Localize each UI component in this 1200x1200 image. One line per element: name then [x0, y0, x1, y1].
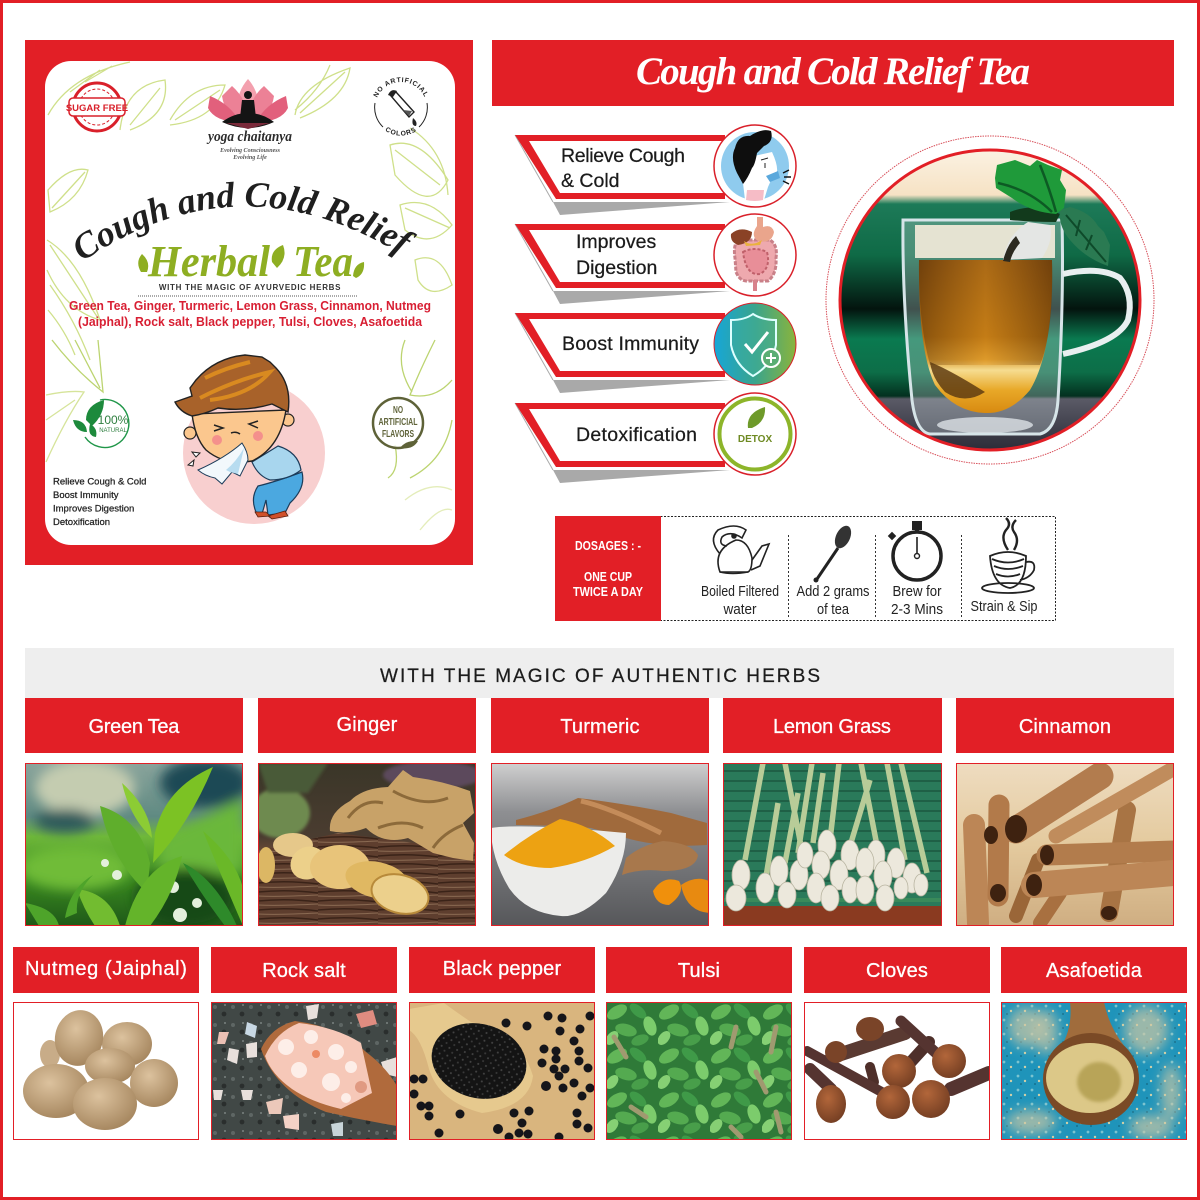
- icon: kettle: [713, 526, 769, 574]
- icon: shield with check: [714, 303, 796, 385]
- herb name: [25, 698, 243, 753]
- step: boiled filtered water: Boiled Filtered: [701, 583, 779, 600]
- benefit text: [576, 231, 657, 279]
- benefit: boost immunity: [515, 303, 796, 393]
- header banner: cough and cold relief tea: [492, 40, 1174, 106]
- ribbon: [515, 313, 730, 393]
- mint leaves: [995, 160, 1110, 266]
- step: add 2 grams of tea: Add 2 grams: [796, 583, 870, 600]
- step: strain and sip: [970, 518, 1038, 615]
- illustration: sneezing boy: [175, 355, 325, 524]
- label white card: [45, 61, 455, 545]
- herb card: green tea: [20, 698, 250, 928]
- herb card: cloves: [804, 947, 990, 1140]
- hair: [175, 355, 289, 416]
- ribbon: [515, 135, 730, 215]
- step: boiled filtered water: water: [723, 601, 756, 618]
- photo: cloves: [805, 1016, 989, 1123]
- benefit: relieve cough and cold: [515, 125, 796, 215]
- badge: no artificial flavors: NO: [393, 405, 403, 416]
- herb card: asafoetida: [1001, 947, 1187, 1140]
- logo: yoga chaitanya lotus: Evolving Consciousness: [219, 148, 281, 154]
- herb name: [1001, 947, 1187, 993]
- step: add 2 grams of tea: [796, 523, 870, 618]
- photo: tea leaves: [26, 764, 242, 925]
- herb card: rock salt: [211, 947, 397, 1140]
- badge: no artificial colors: COLORS: [386, 127, 416, 136]
- decorative leaf outlines: [46, 62, 452, 530]
- benefit text: & Cold: [561, 170, 620, 192]
- photo: nutmegs: [23, 1010, 178, 1130]
- icon: spoon: [814, 523, 854, 582]
- panel: product label: [25, 40, 473, 565]
- step: strain and sip: Strain & Sip: [970, 598, 1038, 615]
- herb name: [258, 698, 476, 753]
- benefit text: Detoxification: [576, 424, 697, 446]
- herb name: [211, 947, 397, 993]
- label benefits list: Boost Immunity: [53, 490, 119, 501]
- step: brew for 2-3 mins: Brew for: [892, 583, 942, 600]
- herb name: [804, 947, 990, 993]
- herb card: black pepper: [409, 947, 595, 1142]
- icon: digestive system: [714, 214, 796, 296]
- panel: dosage instructions: [555, 516, 1056, 621]
- herb name: [13, 947, 199, 993]
- label red frame: [25, 40, 473, 565]
- herb name: [491, 698, 709, 753]
- photo: asafoetida spoon: [1002, 1003, 1186, 1139]
- herb name: [606, 947, 792, 993]
- badge: no artificial colors: [373, 77, 428, 136]
- jeans: [253, 472, 303, 515]
- herb name: Tulsi: [678, 960, 720, 982]
- benefit text: Improves: [576, 231, 656, 253]
- photo: ginger root: [259, 764, 475, 925]
- benefit text: Digestion: [576, 257, 657, 279]
- product subtitle: herbal tea: Herbal: [147, 237, 271, 286]
- head: [184, 427, 196, 439]
- herb name: Lemon Grass: [773, 716, 891, 738]
- icon: detox leaf: [714, 393, 796, 475]
- badge: 100% natural: 100%: [98, 413, 129, 427]
- section heading: with the magic of authentic herbs: [25, 648, 1174, 698]
- photo: peppercorns: [410, 1003, 594, 1139]
- herb name: [956, 698, 1174, 753]
- badge: no artificial flavors: ARTIFICIAL: [378, 417, 418, 428]
- herb card: turmeric: [491, 698, 709, 926]
- badge: 100% natural: [73, 400, 129, 448]
- badge: no artificial flavors: [373, 398, 423, 448]
- photo: lemongrass stalks: [724, 764, 941, 925]
- herb name: Cinnamon: [1019, 716, 1111, 738]
- herb name: Nutmeg (Jaiphal): [25, 958, 187, 980]
- step: boiled filtered water: [701, 526, 779, 618]
- tea mug photo: [826, 136, 1154, 464]
- label benefits list: Improves Digestion: [53, 504, 134, 514]
- photo: turmeric bowl: [492, 764, 708, 925]
- label benefits list: Detoxification: [53, 517, 110, 528]
- herb name: Cloves: [866, 960, 928, 982]
- ribbon: [515, 224, 730, 304]
- herb name: Asafoetida: [1046, 960, 1143, 982]
- label benefits list: [53, 476, 146, 528]
- step: add 2 grams of tea: of tea: [817, 601, 850, 618]
- photo: cinnamon sticks: [957, 764, 1173, 925]
- photo: pink rock salt: [212, 1003, 396, 1139]
- tissue: [198, 443, 248, 484]
- label benefits list: Relieve Cough & Cold: [53, 476, 146, 488]
- product title: cough and cold relief: Cough and Cold Relief: [75, 182, 418, 258]
- herb card: ginger: [250, 698, 483, 926]
- logo: yoga chaitanya lotus: yoga chaitanya: [206, 129, 292, 145]
- dosage red box: ONE CUP: [584, 569, 632, 584]
- dosage red box: DOSAGES : -: [575, 538, 641, 553]
- badge: no artificial colors: NO ARTIFICIAL: [373, 77, 428, 98]
- badge: no artificial flavors: FLAVORS: [382, 429, 414, 440]
- benefit text: [561, 145, 685, 192]
- herb name: Rock salt: [262, 960, 346, 982]
- herb card: nutmeg: [13, 947, 199, 1140]
- icon: stopwatch: [888, 521, 941, 580]
- sneeze droplets: [188, 452, 200, 466]
- badge: sugar free: [66, 83, 128, 131]
- herb name: Turmeric: [560, 716, 640, 738]
- icon: coughing man: [714, 125, 796, 207]
- benefit text: Boost Immunity: [562, 333, 699, 355]
- photo: tulsi plants: [607, 1003, 791, 1139]
- logo: yoga chaitanya lotus: [206, 79, 292, 161]
- step: brew for 2-3 mins: 2-3 Mins: [891, 601, 943, 618]
- benefit: improves digestion: [515, 214, 796, 304]
- herb name: [723, 698, 942, 753]
- header banner: cough and cold relief tea: Cough and Cold Relief Tea: [636, 50, 1030, 93]
- herb card: cinnamon: [956, 698, 1174, 926]
- icon: detox leaf: DETOX: [738, 434, 772, 445]
- herb name: Ginger: [337, 714, 398, 736]
- badge: 100% natural: NATURAL: [99, 428, 127, 434]
- herb card: lemon grass: [723, 698, 942, 926]
- section heading: with the magic of authentic herbs: WITH THE MAGIC OF AUTHENTIC HERBS: [380, 666, 820, 687]
- product subtitle: herbal tea: Tea: [293, 237, 353, 286]
- ingredient list text: Green Tea, Ginger, Turmeric, Lemon Grass, Cinnamon, Nutmeg: [69, 299, 431, 313]
- herb card: tulsi: [606, 947, 792, 1140]
- product subtitle: herbal tea: [138, 237, 364, 286]
- dosage red box: TWICE A DAY: [573, 584, 643, 599]
- shoes: [255, 511, 288, 519]
- glass mug: [903, 220, 1130, 434]
- dosage red box: [555, 516, 661, 621]
- icon: steaming cup: [982, 518, 1034, 593]
- ingredient list text: (Jaiphal), Rock salt, Black pepper, Tulsi, Cloves, Asafoetida: [78, 315, 423, 329]
- tagline: with the magic of ayurvedic herbs: WITH THE MAGIC OF AYURVEDIC HERBS: [159, 283, 341, 292]
- ribbon: [515, 403, 730, 483]
- step: brew for 2-3 mins: [888, 521, 943, 618]
- herb name: Green Tea: [88, 716, 180, 738]
- ingredient list text: [69, 299, 431, 329]
- logo: yoga chaitanya lotus: Evolving Life: [232, 155, 267, 161]
- benefit: detoxification: [515, 393, 796, 483]
- badge: sugar free: SUGAR FREE: [66, 103, 128, 114]
- herb name: Black pepper: [443, 958, 561, 980]
- herb name: [409, 947, 595, 993]
- shirt: [252, 446, 301, 480]
- benefit text: Relieve Cough: [561, 145, 685, 167]
